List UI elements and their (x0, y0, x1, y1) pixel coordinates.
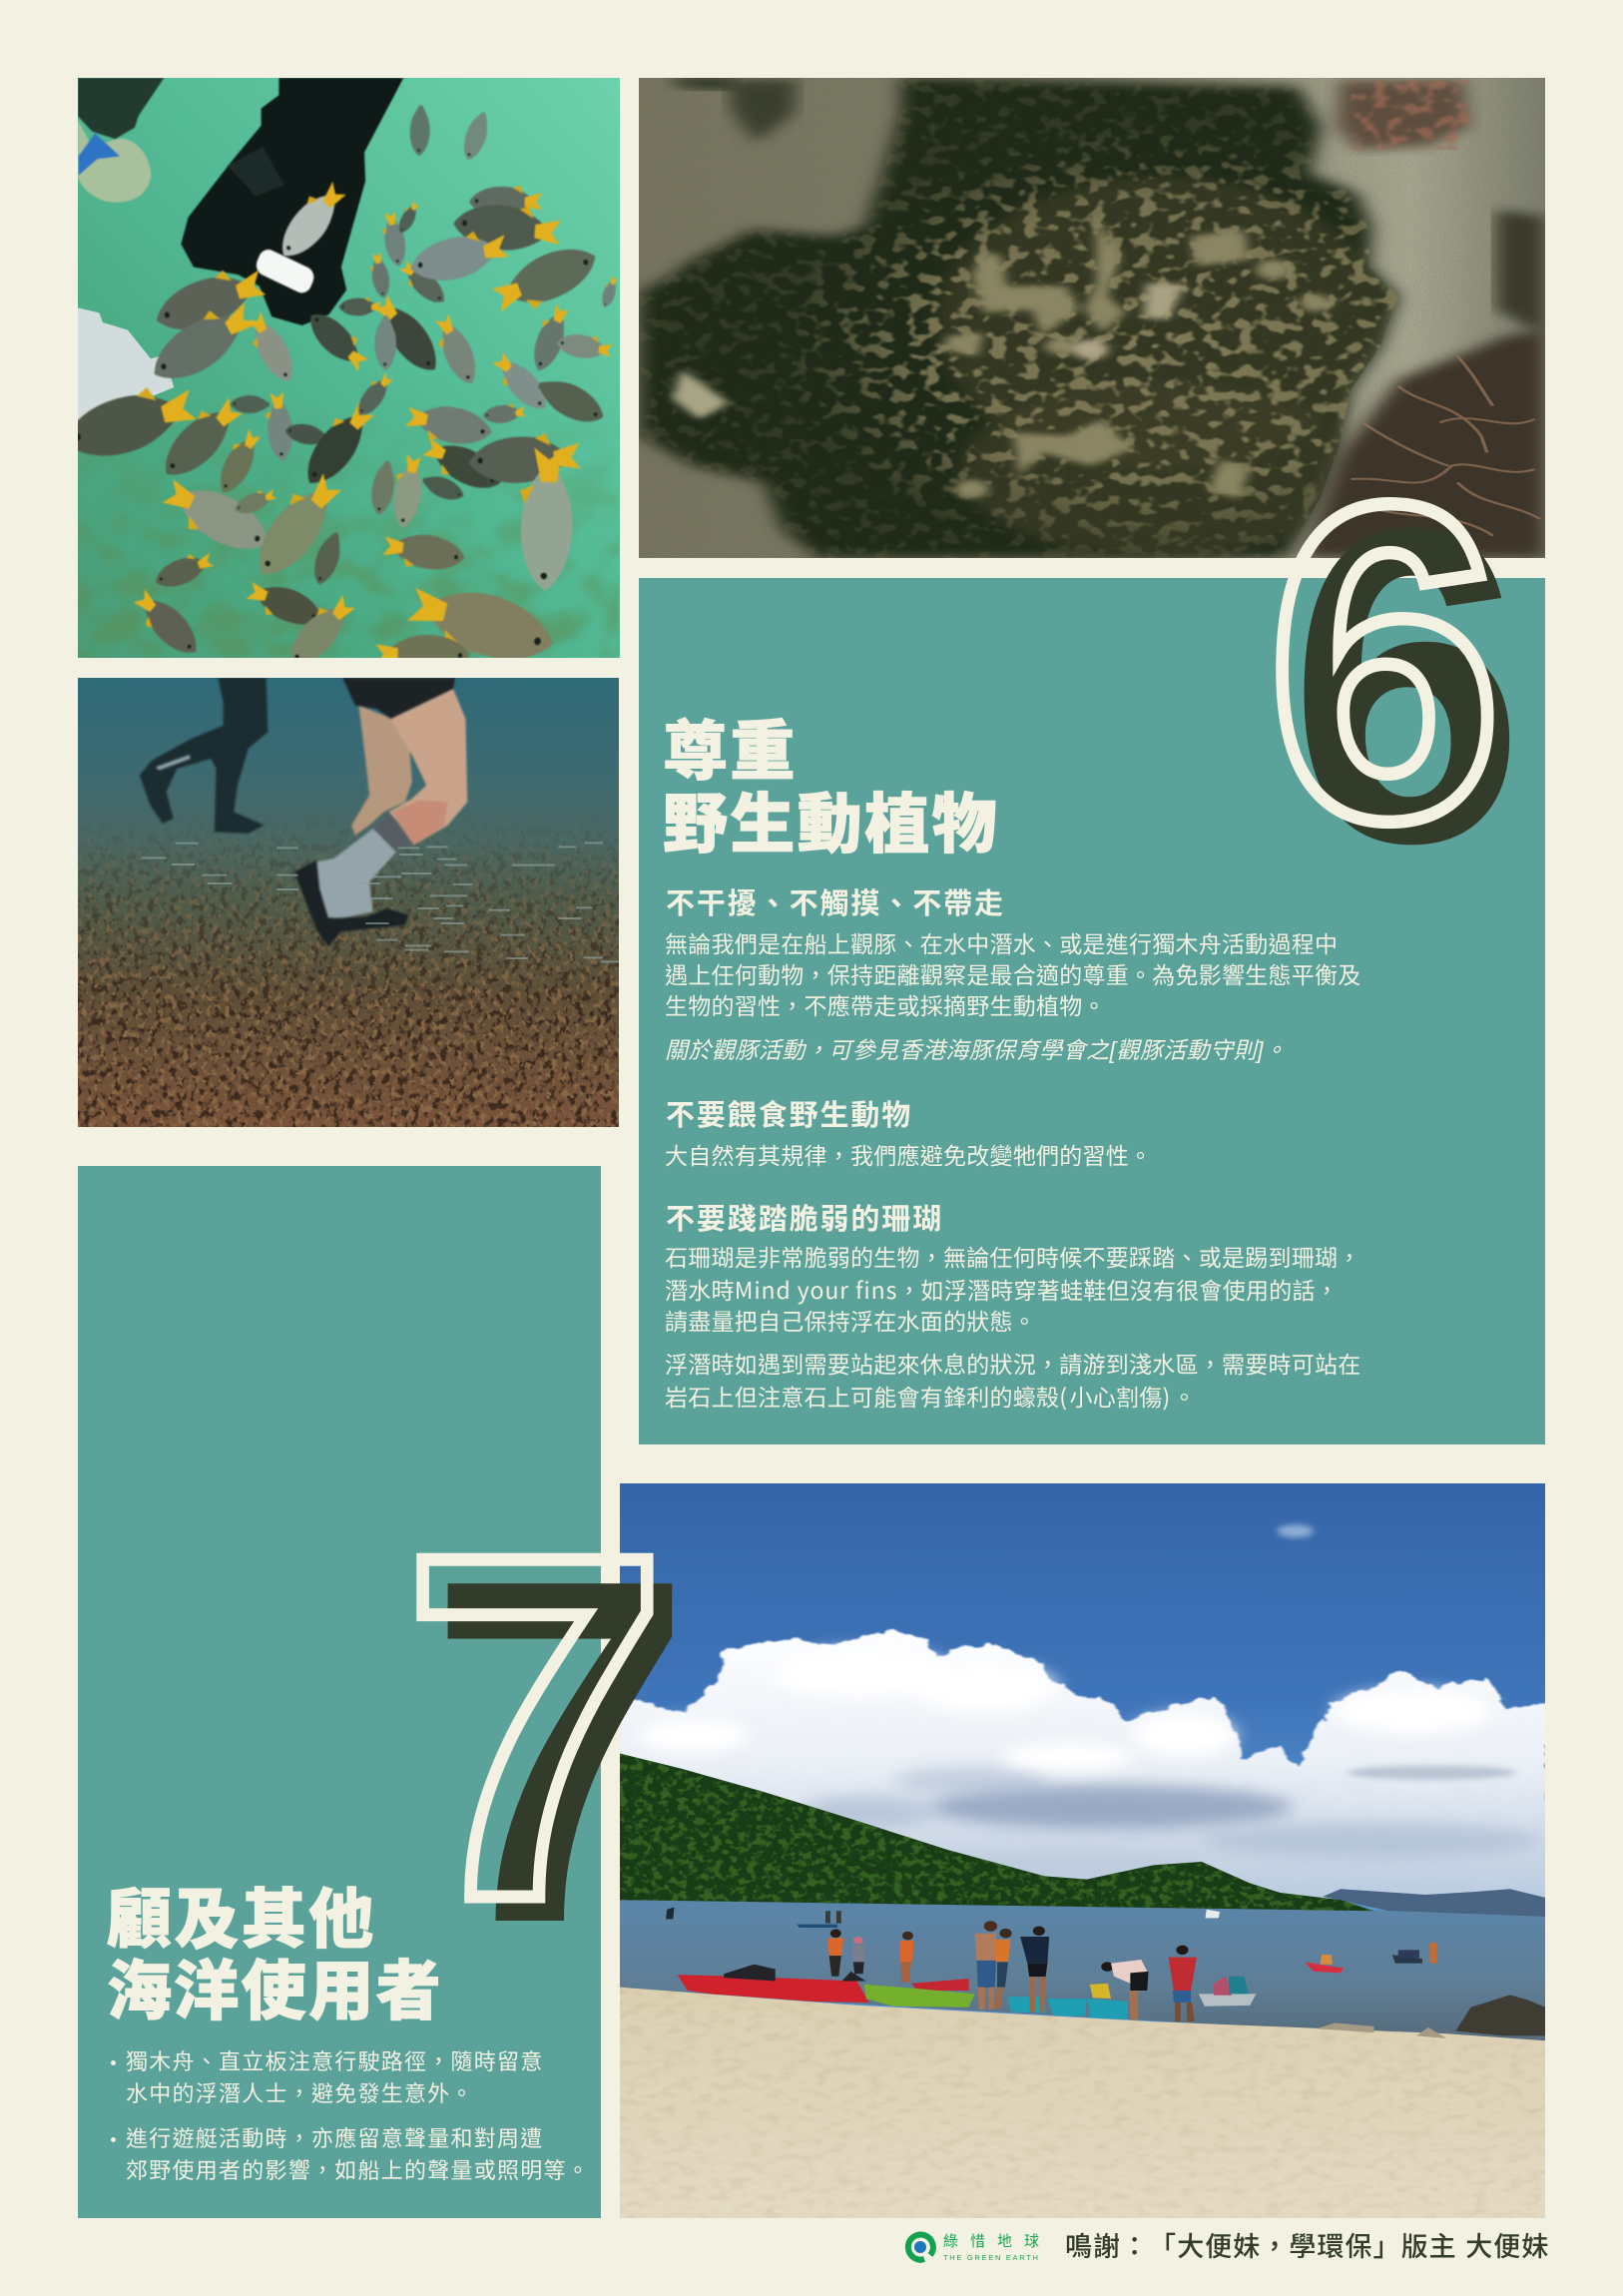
kayaks (678, 1925, 1422, 2019)
icon: green ring with blue dot (904, 2232, 936, 2263)
sand (620, 1984, 1545, 2218)
heading: section 6 title: 野生動植物 (663, 787, 999, 861)
subheading: do not disturb: 不干擾、不觸摸、不帶走 (666, 888, 1005, 920)
text block: observe from a distance: 無論我們是在船上觀豚、在水中潛水、或是進行獨木舟活動過程中 (665, 931, 1338, 957)
credit line: 鳴謝：「大便妹，學環保」版主 大便妹 (1065, 2232, 1549, 2262)
rocks (1317, 1995, 1545, 2038)
text block: resting while snorkelling: 浮潛時如遇到需要站起來休息的狀況，請游到淺水區，需要時可站在 (665, 1352, 1361, 1378)
clouds (615, 1524, 1549, 1900)
top-left diver (78, 78, 164, 203)
tiny silver fish (142, 843, 619, 961)
subheading: do not step on coral: 不要踐踏脆弱的珊瑚 (666, 1204, 943, 1236)
text block: coral is fragile: 石珊瑚是非常脆弱的生物，無論任何時候不要踩踏、或是踢到珊瑚， (665, 1245, 1361, 1271)
text block: nature has its rules: 大自然有其規律，我們應避免改變牠們的習性。 (665, 1143, 1152, 1169)
photo: beach with kayaks under blue sky (620, 1483, 1545, 2218)
panel: section 7 other ocean users (78, 1166, 601, 2218)
diver's black glove (181, 78, 403, 325)
far snorkeller's black leg (140, 678, 268, 834)
bullet: boating noise and lighting: 進行遊艇活動時，亦應留意聲量和對周遭 (126, 2126, 544, 2151)
heading: section 7 title: 海洋使用者 (107, 1955, 443, 2027)
bullet: boating noise and lighting (111, 2126, 590, 2183)
plate coral bottom right (1304, 210, 1545, 558)
people on the beach (666, 1907, 1436, 2021)
text block: coral is fragile (665, 1245, 1361, 1335)
text block: resting while snorkelling (665, 1352, 1361, 1413)
bullet: boating noise and lighting: 郊野使用者的影響，如船上的聲量或照明等。 (126, 2158, 590, 2183)
panel: section 6 respect wildlife (639, 578, 1545, 1444)
pink rock top right (670, 78, 1469, 150)
heading: section 7 title: 顧及其他 (107, 1883, 376, 1956)
fish school (58, 105, 620, 676)
text block: observe from a distance: 生物的習性，不應帶走或採摘野生動植物。 (665, 993, 1106, 1019)
text block: observe from a distance (665, 931, 1361, 1019)
text block: observe from a distance: 遇上任何動物，保持距離觀察是最合適的尊重。為免影響生態平衡及 (665, 962, 1361, 988)
bullet: kayak and paddleboard routes: 獨木舟、直立板注意行駛路徑，隨時留意 (126, 2049, 544, 2074)
heading: section 6 title: 尊重 (663, 715, 798, 788)
near snorkeller's legs (294, 678, 467, 946)
photo: coral colony seen from above (639, 78, 1545, 558)
photo: divers feeding yellow-tailed fish (78, 78, 620, 658)
logo: The Green Earth (904, 2232, 1051, 2263)
heading: section 6 title (663, 715, 999, 861)
text block: resting while snorkelling: 岩石上但注意石上可能會有鋒利的蠔殼(小心割傷)。 (665, 1379, 1196, 1413)
photo: snorkeller's legs above coral (78, 678, 619, 1127)
text block: coral is fragile: 請盡量把自己保持浮在水面的狀態。 (665, 1309, 1036, 1335)
bullet: kayak and paddleboard routes: 水中的浮潛人士，避免發生意外。 (126, 2081, 474, 2106)
white shirt diver at left (78, 307, 174, 433)
far blue hills (1323, 1889, 1545, 1917)
dark reef mass (639, 78, 1410, 558)
heading: section 7 title (107, 1883, 443, 2027)
text block: coral is fragile: 潛水時Mind your fins，如浮潛時穿著蛙鞋但沒有很會使用的話， (665, 1272, 1339, 1306)
note: dolphin watching code: 關於觀豚活動，可參見香港海豚保育學會之[觀豚活動守則]。 (665, 1037, 1287, 1063)
water (620, 1895, 1545, 2043)
bullet: kayak and paddleboard routes (111, 2049, 544, 2106)
subheading: do not feed wildlife: 不要餵食野生動物 (666, 1100, 912, 1132)
green hills (620, 1750, 1381, 1912)
logo wordmark: 綠惜地球 (943, 2233, 1051, 2250)
logo English name: THE GREEN EARTH (943, 2253, 1040, 2262)
